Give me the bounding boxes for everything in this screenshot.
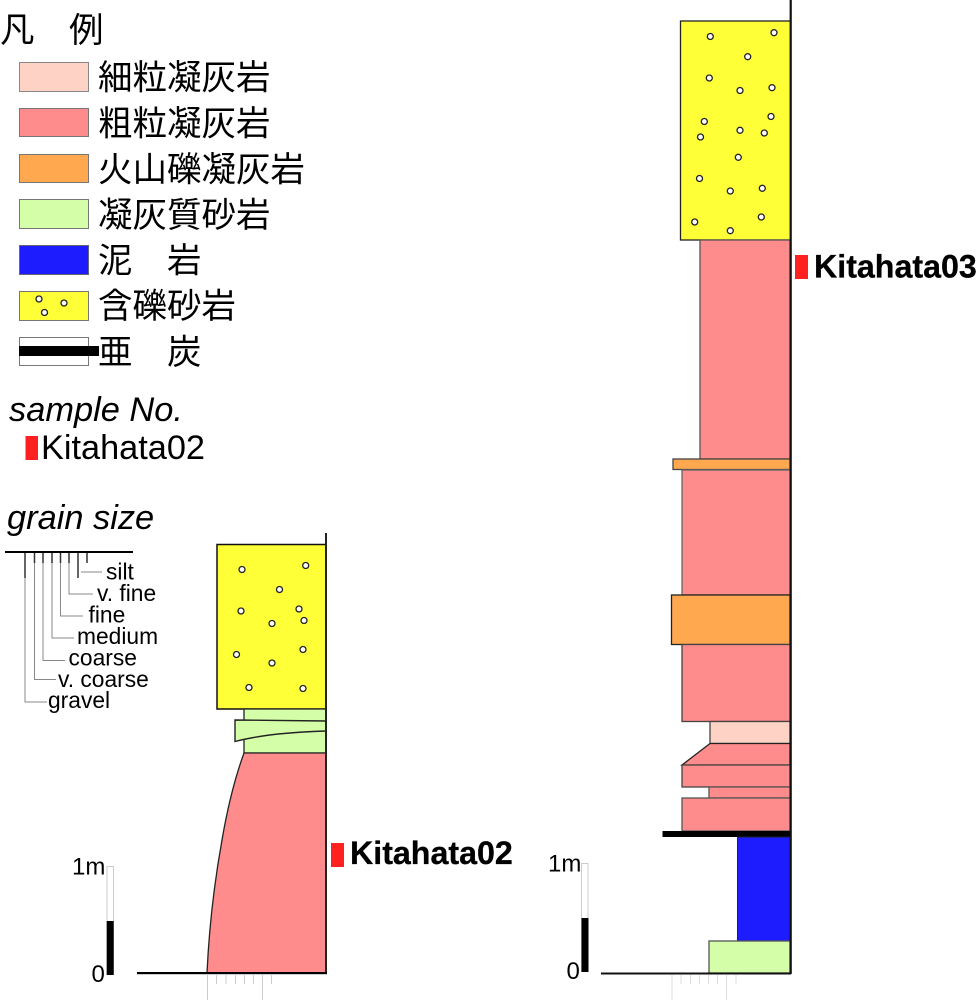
grain size scale: v. fine — [97, 580, 156, 606]
base line — [601, 972, 791, 974]
pebbly sandstone bed — [217, 544, 326, 709]
legend title: 凡 例 — [0, 12, 104, 50]
scale bar: 0 — [92, 961, 105, 988]
lignite seam — [662, 831, 790, 837]
scale bar: 0 — [566, 958, 580, 985]
legend item: fine tuff — [20, 60, 270, 98]
grain size scale: coarse — [68, 644, 137, 670]
grain size scale — [5, 551, 158, 713]
legend — [0, 12, 305, 372]
grain size key — [5, 499, 158, 713]
legend item: lignite — [19, 334, 202, 372]
coarse tuff thin bed — [709, 787, 790, 798]
legend item: tuffaceous sandstone — [20, 197, 270, 235]
section axis — [325, 533, 327, 974]
grain size scale: gravel — [48, 687, 110, 713]
coarse tuff wedge — [682, 744, 790, 765]
sample marker — [795, 255, 808, 279]
sample label: Kitahata03 — [814, 248, 976, 284]
mudstone bed — [738, 837, 790, 941]
coarse tuff bed — [207, 753, 326, 973]
sample number legend — [9, 391, 205, 467]
coarse tuff bed — [682, 765, 790, 787]
scale bar: 1m — [548, 850, 581, 878]
grain size scale: silt — [106, 558, 135, 584]
base line — [137, 972, 327, 974]
legend item: coarse tuff — [20, 106, 270, 144]
grain size ticks — [208, 974, 272, 1000]
pebbly sandstone bed — [680, 21, 790, 240]
grain size ticks — [672, 975, 736, 1000]
sample marker — [26, 436, 38, 460]
lapilli tuff bed — [672, 595, 790, 644]
coarse tuff bed — [700, 240, 790, 459]
legend item: mudstone — [20, 242, 202, 280]
grain size scale: medium — [77, 623, 158, 649]
coarse tuff bed — [682, 644, 790, 722]
scale bar: 1m — [72, 854, 105, 880]
legend item: lignite: 亜 炭 — [98, 334, 202, 372]
sample heading: sample No. — [9, 391, 183, 429]
section axis — [790, 0, 792, 974]
coarse tuff bed — [682, 798, 790, 831]
column: Kitahata03 section — [548, 0, 976, 1000]
fine tuff bed — [710, 722, 790, 744]
legend item: mudstone: 泥 岩 — [98, 242, 202, 280]
coarse tuff bed — [682, 470, 790, 595]
sample label: Kitahata02 — [350, 835, 513, 871]
column: Kitahata02 section — [72, 533, 513, 1000]
scale bar — [548, 850, 588, 985]
legend item: pebbly sandstone: 含礫砂岩 — [98, 288, 236, 326]
grain size scale: fine — [88, 602, 125, 628]
grain size scale: v. coarse — [58, 666, 149, 692]
scale bar — [72, 854, 114, 988]
legend item: pebbly sandstone — [20, 288, 236, 326]
sample marker — [331, 843, 344, 867]
sample label: Kitahata02 — [41, 429, 205, 467]
legend item: fine tuff: 細粒凝灰岩 — [98, 60, 270, 98]
tuffaceous sandstone bed — [709, 941, 790, 973]
tuffaceous sandstone lens — [235, 720, 326, 742]
tuffaceous sandstone bed — [244, 709, 326, 753]
lapilli tuff thin bed — [673, 459, 790, 470]
legend item: lapilli tuff: 火山礫凝灰岩 — [98, 152, 305, 190]
grain size heading: grain size — [7, 499, 154, 537]
legend item: tuffaceous sandstone: 凝灰質砂岩 — [98, 197, 270, 235]
legend item: coarse tuff: 粗粒凝灰岩 — [98, 106, 270, 144]
